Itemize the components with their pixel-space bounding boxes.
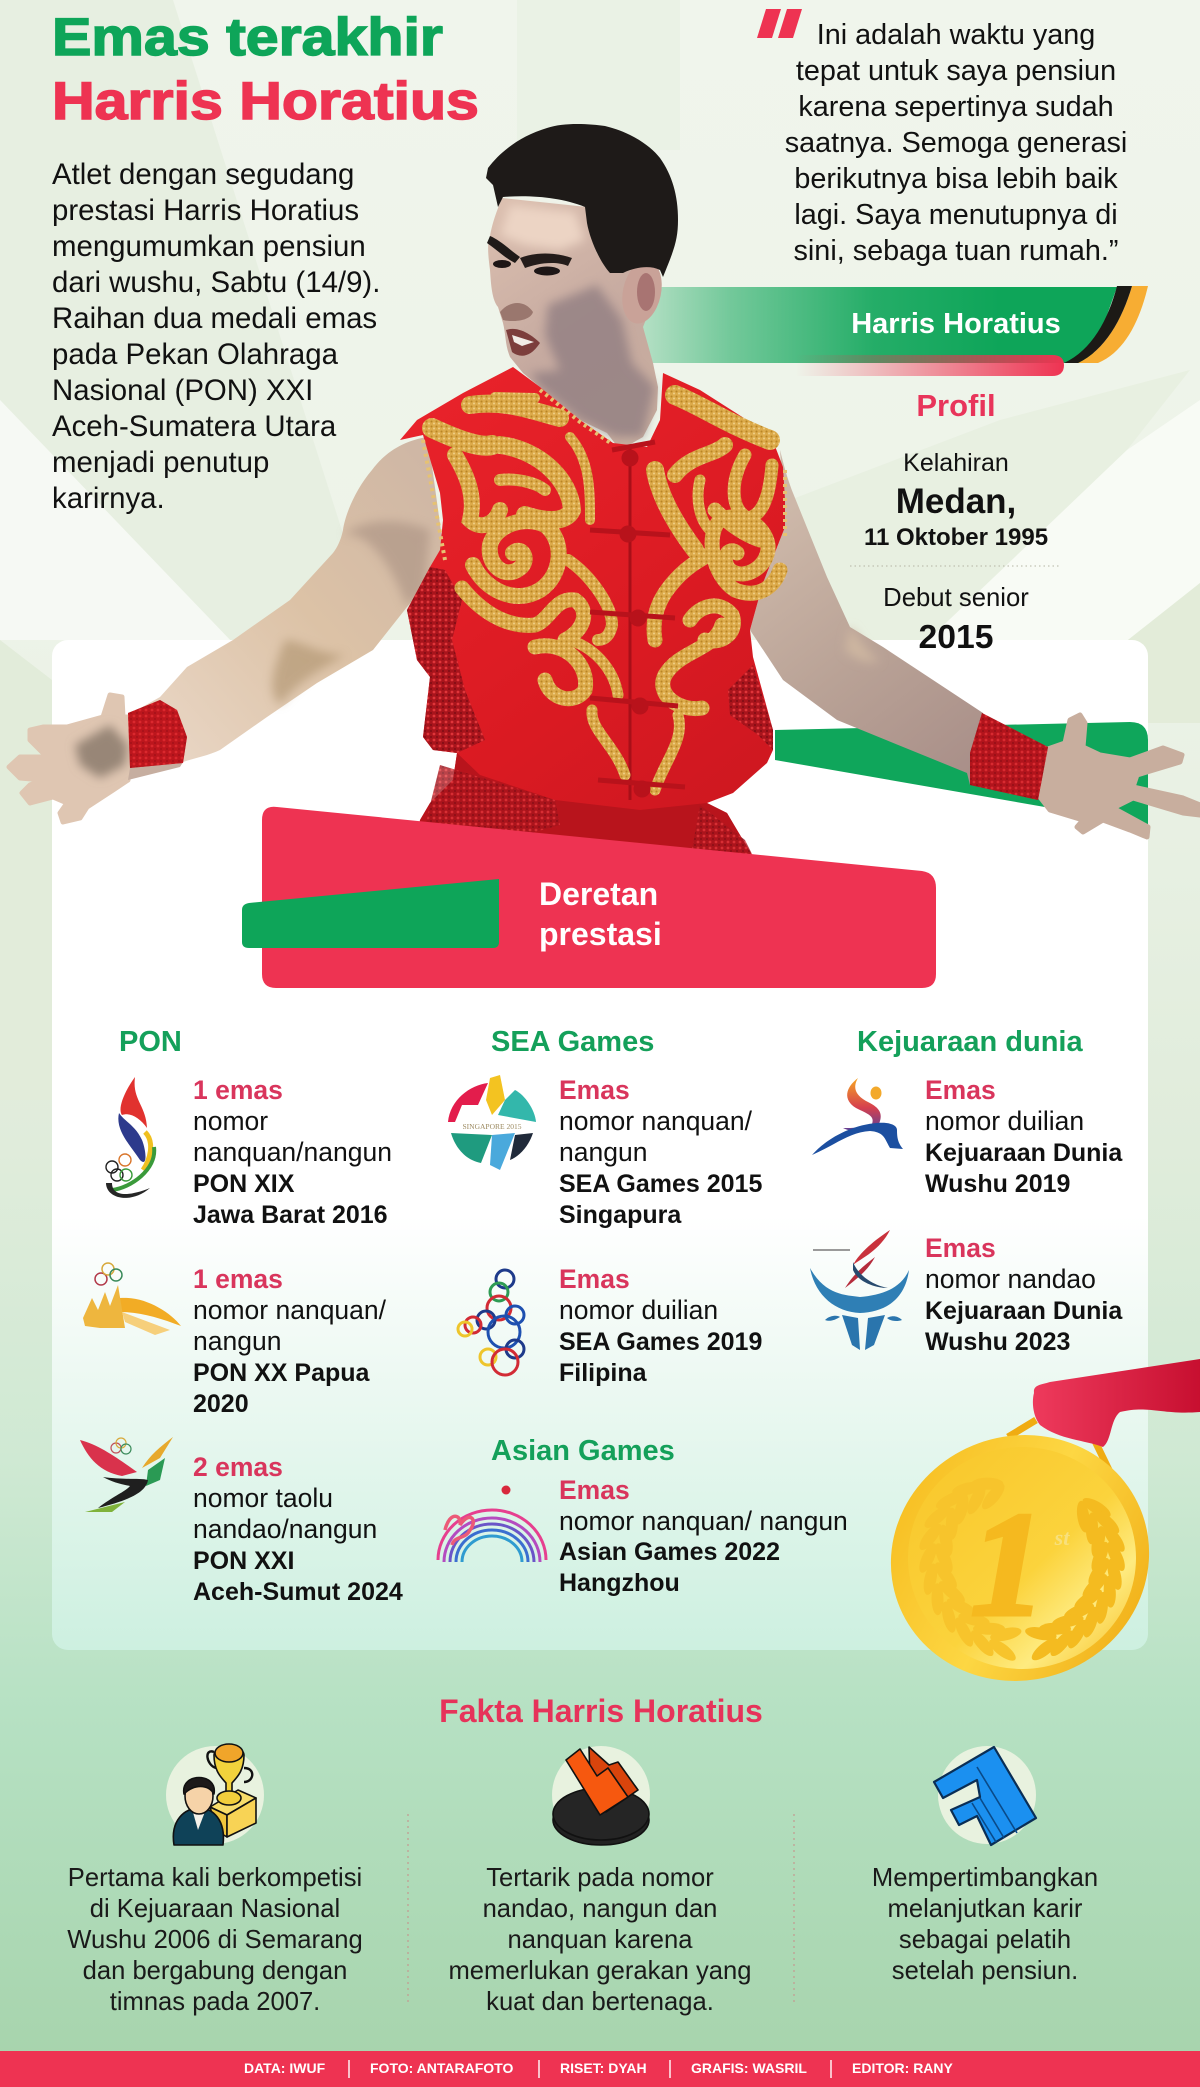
column: PON: nandao/nangun (193, 1514, 377, 1544)
name banner: Harris Horatius (851, 308, 1061, 340)
red vest (400, 367, 785, 860)
footer credits: DATA: IWUF (244, 2060, 326, 2076)
column: PON: nomor taolu (193, 1483, 333, 1513)
fact: events of interest: memerlukan gerakan yang (448, 1957, 752, 1985)
frog buttons (590, 442, 685, 795)
heading panel: Deretan prestasi (242, 807, 936, 988)
icon: quote mark (757, 9, 802, 38)
column: PON: PON XIX (193, 1170, 295, 1198)
column: SEA Games and Asian Games: nomor nanquan/ (559, 1106, 753, 1136)
profile: Medan, (896, 482, 1016, 521)
logo: PON XX (83, 1263, 181, 1335)
ribbon (1033, 1359, 1200, 1447)
column: PON: Jawa Barat 2016 (193, 1201, 388, 1229)
column: SEA Games and Asian Games: Asian Games 2022 (559, 1538, 780, 1566)
icon: athlete with trophy (166, 1744, 264, 1845)
quote text: tepat untuk saya pensiun (796, 55, 1116, 87)
fact: events of interest: kuat dan bertenaga. (486, 1988, 714, 2016)
profile: 2015 (919, 618, 993, 656)
left arm (9, 437, 445, 822)
illustration: gold medal: 1 (971, 1483, 1045, 1647)
column: SEA Games and Asian Games: nomor duilian (559, 1295, 718, 1325)
column: PON: Aceh-Sumut 2024 (193, 1578, 403, 1606)
column: Kejuaraan dunia: nomor nandao (925, 1264, 1096, 1294)
column: SEA Games and Asian Games: nangun (559, 1137, 647, 1167)
intro text: dari wushu, Sabtu (14/9). (52, 266, 380, 299)
column: Kejuaraan dunia: Kejuaraan dunia (857, 1026, 1083, 1058)
name banner (640, 286, 1148, 376)
fact separators (408, 1814, 794, 2005)
column: PON: 2020 (193, 1390, 249, 1418)
collar beads (540, 390, 612, 444)
intro text: Raihan dua medali emas (52, 302, 377, 335)
background rays (0, 0, 1200, 1100)
title: Harris Horatius (52, 71, 479, 130)
profile: Debut senior (883, 584, 1029, 612)
column: SEA Games and Asian Games: nomor nanquan/ nangun (559, 1506, 848, 1536)
column: Kejuaraan dunia: nomor duilian (925, 1106, 1084, 1136)
green band behind arm (775, 722, 1148, 825)
profile (850, 388, 1060, 656)
column: PON (80, 1026, 403, 1606)
column: Kejuaraan dunia: Wushu 2023 (925, 1328, 1070, 1356)
sequin panels (407, 567, 485, 753)
quote text: Ini adalah waktu yang (817, 19, 1095, 51)
fact: first competition: dan bergabung dengan (83, 1957, 347, 1985)
illustration: gold medal: st (1054, 1525, 1070, 1550)
column: PON: 1 emas (193, 1075, 283, 1105)
logo: SEA Games 2015 (448, 1075, 536, 1170)
illustration: gold medal (856, 1359, 1200, 1717)
column: Kejuaraan dunia: Wushu 2019 (925, 1170, 1070, 1198)
title (52, 7, 479, 130)
fact: first competition: Pertama kali berkompetisi (68, 1864, 362, 1892)
hair (486, 124, 678, 277)
column: SEA Games and Asian Games: SEA Games (491, 1026, 654, 1058)
column: PON: nomor (193, 1106, 268, 1136)
column: SEA Games and Asian Games: Emas (559, 1475, 630, 1505)
column: SEA Games and Asian Games: SEA Games 2019 (559, 1328, 762, 1356)
quote text: berikutnya bisa lebih baik (794, 163, 1118, 195)
icon: glove on disc (552, 1746, 650, 1845)
right arm (750, 450, 1200, 837)
fact: events of interest: nandao, nangun dan (483, 1895, 717, 1923)
column: SEA Games and Asian Games: Asian Games (491, 1435, 675, 1467)
title: Emas terakhir (52, 7, 443, 66)
column: SEA Games and Asian Games: Emas (559, 1075, 630, 1105)
column: PON: nanquan/nangun (193, 1137, 392, 1167)
quote text: karena sepertinya sudah (798, 91, 1114, 123)
intro text: Nasional (PON) XXI (52, 374, 313, 407)
fact: events of interest: nanquan karena (507, 1926, 693, 1954)
logo: Kejuaraan Dunia 2023 (810, 1230, 909, 1350)
fact: coaching career: setelah pensiun. (892, 1957, 1078, 1985)
column: SEA Games and Asian Games: Hangzhou (559, 1569, 680, 1597)
intro text: Aceh-Sumatera Utara (52, 410, 337, 443)
intro text: prestasi Harris Horatius (52, 194, 359, 227)
column: Kejuaraan dunia: Kejuaraan Dunia (925, 1297, 1123, 1325)
column: SEA Games and Asian Games (438, 1026, 848, 1597)
logo: SEA Games 2015: SINGAPORE 2015 (463, 1122, 522, 1131)
logo: Asian Games 2022 (438, 1486, 546, 1562)
profile: 11 Oktober 1995 (864, 524, 1048, 551)
heading panel: Deretan prestasi: prestasi (539, 916, 662, 952)
logo: Kejuaraan Dunia 2019 (812, 1078, 903, 1155)
panel: achievements card (52, 640, 1148, 1650)
footer credits: GRAFIS: WASRIL (691, 2060, 807, 2076)
intro text: Atlet dengan segudang (52, 158, 354, 191)
column: SEA Games and Asian Games: Singapura (559, 1201, 682, 1229)
fact: coaching career: melanjutkan karir (888, 1895, 1083, 1923)
logo: PON XIX (106, 1077, 154, 1198)
intro text: menjadi penutup (52, 446, 269, 479)
column: Kejuaraan dunia: Emas (925, 1075, 996, 1105)
footer credits (0, 2051, 1200, 2087)
laurel wreath (916, 1478, 1128, 1664)
profile: Kelahiran (903, 449, 1009, 477)
fact: first competition: di Kejuaraan Nasional (90, 1895, 340, 1923)
fact: first competition: Wushu 2006 di Semarang (67, 1926, 363, 1954)
intro text: mengumumkan pensiun (52, 230, 366, 263)
logo: SEA Games 2019 (458, 1270, 524, 1375)
profile: Profil (916, 388, 996, 423)
quote text: saatnya. Semoga generasi (785, 127, 1127, 159)
column: Kejuaraan dunia (810, 1026, 1123, 1356)
column: PON: PON XXI (193, 1547, 294, 1575)
fact: coaching career: sebagai pelatih (899, 1926, 1071, 1954)
intro text: karirnya. (52, 482, 165, 515)
column: SEA Games and Asian Games: Filipina (559, 1359, 648, 1387)
column: PON: nomor nanquan/ (193, 1295, 387, 1325)
quote text: sini, sebaga tuan rumah.” (794, 235, 1118, 267)
icon: blue emblem (934, 1746, 1036, 1845)
heading panel: Deretan prestasi: Deretan (539, 876, 658, 912)
column: SEA Games and Asian Games: Emas (559, 1264, 630, 1294)
neck and face (487, 198, 667, 450)
footer credits: RISET: DYAH (560, 2060, 647, 2076)
column: PON: 2 emas (193, 1452, 283, 1482)
gold embroidery (432, 395, 780, 790)
column: Kejuaraan dunia: Kejuaraan Dunia (925, 1139, 1123, 1167)
column: PON: PON XX Papua (193, 1359, 371, 1387)
logo: PON XXI (80, 1437, 173, 1512)
fact: first competition: timnas pada 2007. (110, 1988, 320, 2016)
heading: Fakta Harris Horatius: Fakta Harris Horatius (439, 1693, 763, 1729)
column: Kejuaraan dunia: Emas (925, 1233, 996, 1263)
footer credits: FOTO: ANTARAFOTO (370, 2060, 513, 2076)
footer credits: EDITOR: RANY (852, 2060, 954, 2076)
athlete photo (9, 124, 1200, 860)
column: PON: nangun (193, 1326, 281, 1356)
fact: coaching career: Mempertimbangkan (872, 1864, 1098, 1892)
quote text: lagi. Saya menutupnya di (794, 199, 1118, 231)
column: PON: 1 emas (193, 1264, 283, 1294)
column: PON: PON (119, 1026, 182, 1058)
column: SEA Games and Asian Games: SEA Games 2015 (559, 1170, 762, 1198)
intro text: pada Pekan Olahraga (52, 338, 339, 371)
fact: events of interest: Tertarik pada nomor (486, 1864, 714, 1892)
